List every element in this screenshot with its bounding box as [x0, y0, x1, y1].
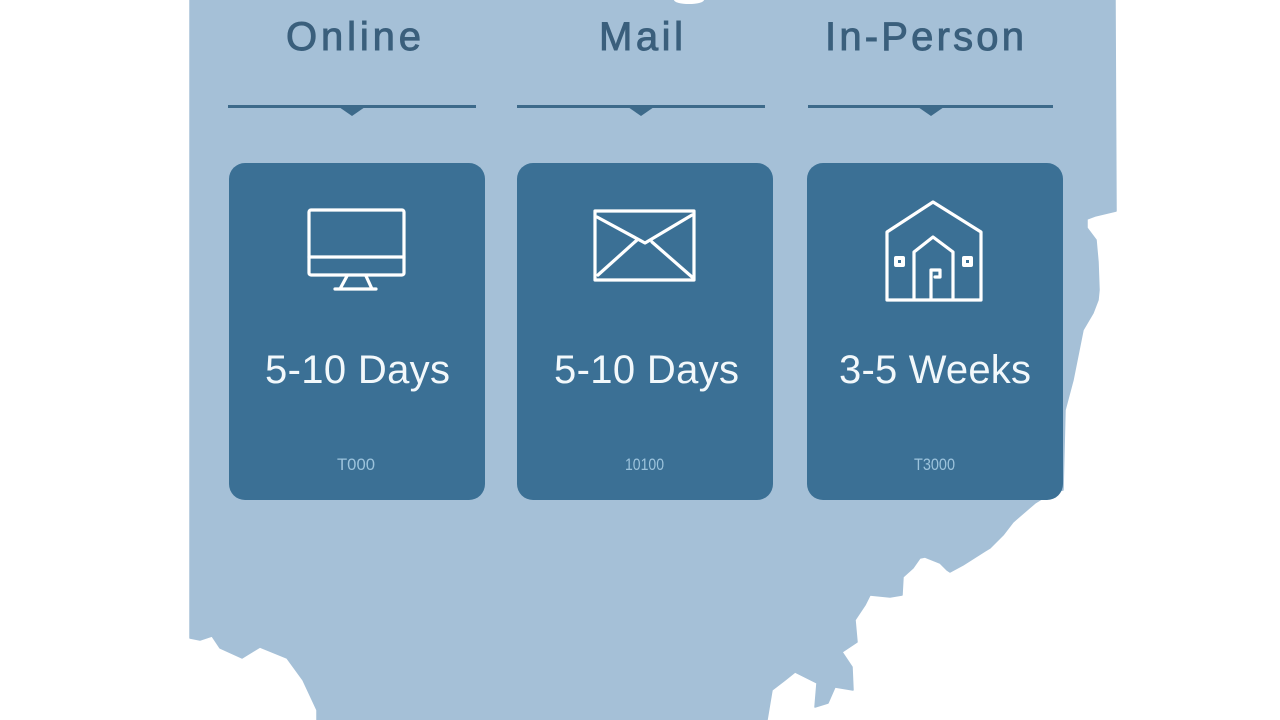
- white blob at top edge: [674, 0, 704, 4]
- small code label: 10100: [625, 455, 664, 474]
- processing time: 5-10 Days: 5-10 Days: [554, 348, 739, 392]
- small code label: T3000: [914, 455, 955, 474]
- heading: In-Person: In-Person: [825, 15, 1024, 59]
- column: Online: [228, 15, 485, 500]
- card: Online: [229, 163, 485, 500]
- divider with pointer: Mail: [517, 105, 765, 116]
- heading: Mail: Mail: [599, 15, 683, 59]
- background map shape: [190, 0, 1116, 720]
- icon: building: [887, 202, 981, 300]
- divider with pointer: Online: [228, 105, 476, 116]
- processing time: 3-5 Weeks: 3-5 Weeks: [839, 348, 1031, 392]
- small code label: T000: [337, 455, 375, 474]
- icon: envelope: [595, 211, 694, 280]
- divider with pointer: In-Person: [808, 105, 1053, 116]
- processing time: 5-10 Days: 5-10 Days: [265, 348, 450, 392]
- icon: desktop monitor: [309, 210, 404, 289]
- heading: Online: Online: [286, 15, 421, 59]
- card: In-Person: [807, 163, 1063, 500]
- card: Mail: [517, 163, 773, 500]
- column: In-Person: [807, 15, 1063, 500]
- column: Mail: [517, 15, 773, 500]
